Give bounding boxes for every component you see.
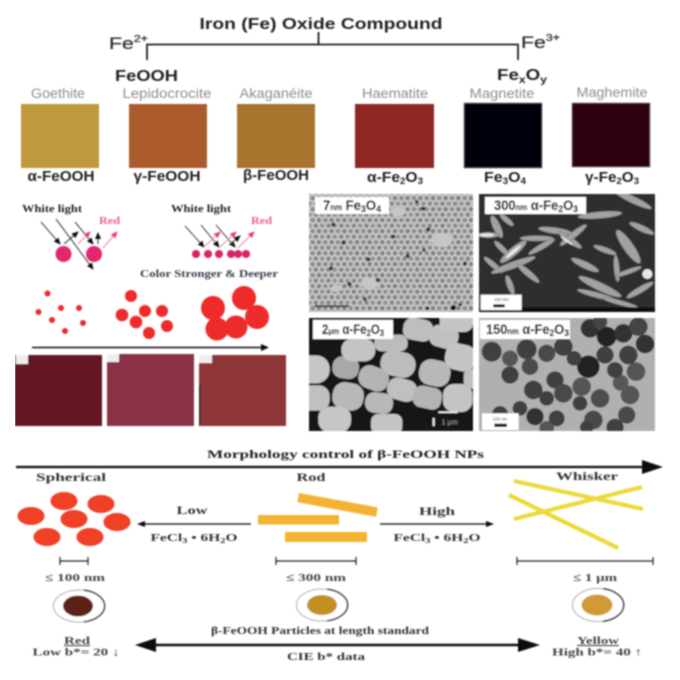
photo: sample 3 (199, 355, 286, 426)
dish: red sample (54, 590, 105, 622)
panel: TEM image 150 nm alpha-Fe2O3 (479, 314, 655, 436)
label: 300 nm alpha-Fe2O3: 300nm α-Fe (494, 198, 560, 213)
scale marker (433, 411, 458, 427)
swatch: maghemite: Maghemite (576, 85, 648, 100)
swatch: goethite: Goethite (31, 86, 85, 101)
label: FeCl3 low: • 6H (187, 532, 221, 544)
photo: sample 2 (107, 354, 194, 426)
swatch: lepidocrocite (122, 86, 212, 185)
label: 2 um alpha-Fe2O3 (313, 320, 393, 339)
heading: morphology control: Morphology control of β-FeOOH NPs (207, 447, 484, 461)
panel: iron oxide compound tree (109, 16, 560, 86)
panel: light scattering diagram (15, 204, 286, 426)
label: 7 nm Fe3O4: 4 (376, 204, 381, 214)
swatch: maghemite (572, 85, 650, 186)
scale box: 100 nm (494, 297, 509, 302)
swatch: haematite: 3 (418, 176, 423, 186)
swatch: lepidocrocite: Lepidocrocite (122, 86, 212, 101)
panel: morphology control (16, 447, 663, 663)
label: white light right: White light (171, 204, 232, 215)
arrow: low concentration (137, 521, 251, 527)
label: 300 nm alpha-Fe2O3 (485, 197, 586, 214)
label: 1 um: ≤ 1 μm (573, 572, 617, 584)
swatch: goethite (21, 86, 99, 185)
label: 7 nm Fe3O4 (315, 197, 389, 214)
label: 300 nm alpha-Fe2O3: 3 (573, 204, 578, 214)
swatch: magnetite: Magnetite (470, 86, 534, 101)
label: CIE b* data: CIE b* data (287, 651, 366, 663)
label: Fe3+: Fe (521, 33, 541, 52)
swatch: magnetite (464, 86, 542, 186)
swatch: haematite: 2 (400, 176, 405, 186)
dish: yellow sample (572, 588, 624, 622)
swatch: akaganeite: Akaganéite (240, 86, 312, 101)
swatch: haematite (355, 86, 434, 186)
label: yellow high b*: High b*= 40 ↑ (552, 646, 642, 658)
swatch: magnetite: O (508, 170, 520, 186)
label: FeCl3 high: 2 (463, 536, 469, 545)
label: red right: Red (251, 216, 272, 227)
scale box: 100 nm (493, 416, 508, 421)
label: FeCl3 high: FeCl (393, 532, 416, 544)
rod particles (258, 493, 378, 542)
swatch: akaganeite (237, 86, 315, 184)
label: red low b*: Red (64, 635, 90, 647)
medium red particles (116, 290, 173, 339)
label: FexOy: x (519, 75, 526, 86)
panel: TEM image 7 nm Fe3O4 (309, 194, 473, 312)
label: FeCl3 high: • 6H (430, 532, 464, 544)
label: 7 nm Fe3O4: O (366, 198, 376, 213)
caption: particles at length standard: β-FeOOH Particles at length standard (211, 626, 430, 637)
scale box (481, 295, 522, 310)
swatch: akaganeite: β-FeOOH (243, 168, 309, 184)
panel: SEM image 300 nm alpha-Fe2O3 (478, 189, 655, 312)
label: yellow high b* (552, 635, 642, 658)
label: FeCl3 high: O (469, 532, 481, 544)
tree connector lines (147, 32, 518, 60)
label: whisker: Whisker (556, 469, 619, 483)
label: 7 nm Fe3O4: 7nm Fe (323, 198, 362, 213)
scale box (482, 413, 519, 430)
label: FexOy: y (540, 75, 548, 86)
small red particles (36, 290, 86, 334)
swatch: magnetite: Fe (484, 170, 501, 186)
spherical particles (18, 492, 130, 546)
label: FeOOH: FeOOH (115, 68, 178, 85)
swatch: maghemite: 2 (616, 176, 622, 186)
label: 2 um alpha-Fe2O3: 2 (367, 328, 371, 338)
label: FeCl3 high: 3 (425, 536, 431, 545)
label: 2 um alpha-Fe2O3: 3 (380, 328, 384, 338)
label: yellow high b*: Yellow (577, 635, 619, 647)
label: FeCl3 low: FeCl (150, 532, 173, 544)
swatch: haematite: Haematite (362, 86, 428, 101)
label: 300 nm: ≤ 300 nm (286, 572, 346, 584)
photo: sample 1 (15, 355, 102, 426)
label: white light left: White light (22, 204, 83, 215)
label: red low b* (32, 635, 120, 658)
swatch: magnetite: 3 (503, 176, 508, 186)
label: FeCl3 low: O (226, 532, 238, 544)
label: 150 nm alpha-Fe2O3: 3 (564, 328, 569, 338)
label: 7 nm Fe3O4: 3 (361, 204, 366, 214)
label: Fe3+: 3+ (546, 33, 560, 44)
scale bar: whisker (517, 557, 653, 565)
label: FexOy: Fe (497, 67, 515, 84)
swatch: haematite: α-Fe (367, 170, 398, 186)
swatch: maghemite: O (622, 170, 634, 186)
label: rod: Rod (296, 470, 326, 484)
double arrow: CIE b* scale (135, 638, 540, 652)
label: 150 nm alpha-Fe2O3: 2 (549, 328, 554, 338)
scale bar: rod (276, 557, 356, 565)
label: red left: Red (99, 216, 120, 227)
arrow: increasing particle size (32, 344, 269, 351)
label: 2 um alpha-Fe2O3: O (371, 322, 380, 337)
dish: rod sample (296, 589, 348, 621)
swatch: goethite: α-FeOOH (28, 169, 94, 185)
whisker particles (509, 481, 643, 548)
label: low: Low (176, 503, 208, 517)
arrow: high concentration (380, 521, 494, 527)
label: 150 nm alpha-Fe2O3: O (554, 322, 564, 337)
scale bar: spherical (60, 557, 88, 565)
large particles with light rays (41, 219, 117, 269)
label: 100 nm: ≤ 100 nm (45, 572, 105, 584)
label: 150 nm alpha-Fe2O3 (480, 320, 570, 339)
arrow: morphology axis (16, 460, 663, 474)
panel: colour swatches (21, 85, 650, 186)
label: Fe2+: Fe (109, 34, 129, 53)
large red particles (201, 286, 269, 340)
title: Iron (Fe) Oxide Compound (200, 16, 442, 33)
label: FeCl3 low: 3 (182, 536, 188, 545)
label: Fe2+: 2+ (134, 34, 148, 45)
label: 150 nm alpha-Fe2O3: 150nm α-Fe (486, 322, 551, 337)
swatch: haematite: O (405, 170, 418, 186)
label: FeCl3 low: 2 (220, 536, 226, 545)
swatch: lepidocrocite: γ-FeOOH (134, 169, 200, 185)
small particles with light rays (185, 225, 254, 258)
label: spherical: Spherical (36, 470, 107, 484)
label: 2 um alpha-Fe2O3: 2μm α-Fe (322, 322, 372, 337)
label: high: High (419, 504, 455, 518)
panel: SEM image 2 um alpha-Fe2O3 (297, 308, 480, 434)
swatch: maghemite: γ-Fe (585, 170, 615, 186)
label: 300 nm alpha-Fe2O3: 2 (558, 204, 563, 214)
swatch: magnetite: 4 (520, 176, 526, 186)
label: red low b*: Low b*= 20 ↓ (32, 646, 120, 658)
label: 300 nm alpha-Fe2O3: O (563, 198, 573, 213)
label: colour stronger and deeper: Color Stronger & Deeper (140, 268, 278, 280)
swatch: maghemite: 3 (634, 176, 639, 186)
scale marker: 1 μm (441, 418, 458, 427)
label: FexOy: O (526, 67, 540, 84)
